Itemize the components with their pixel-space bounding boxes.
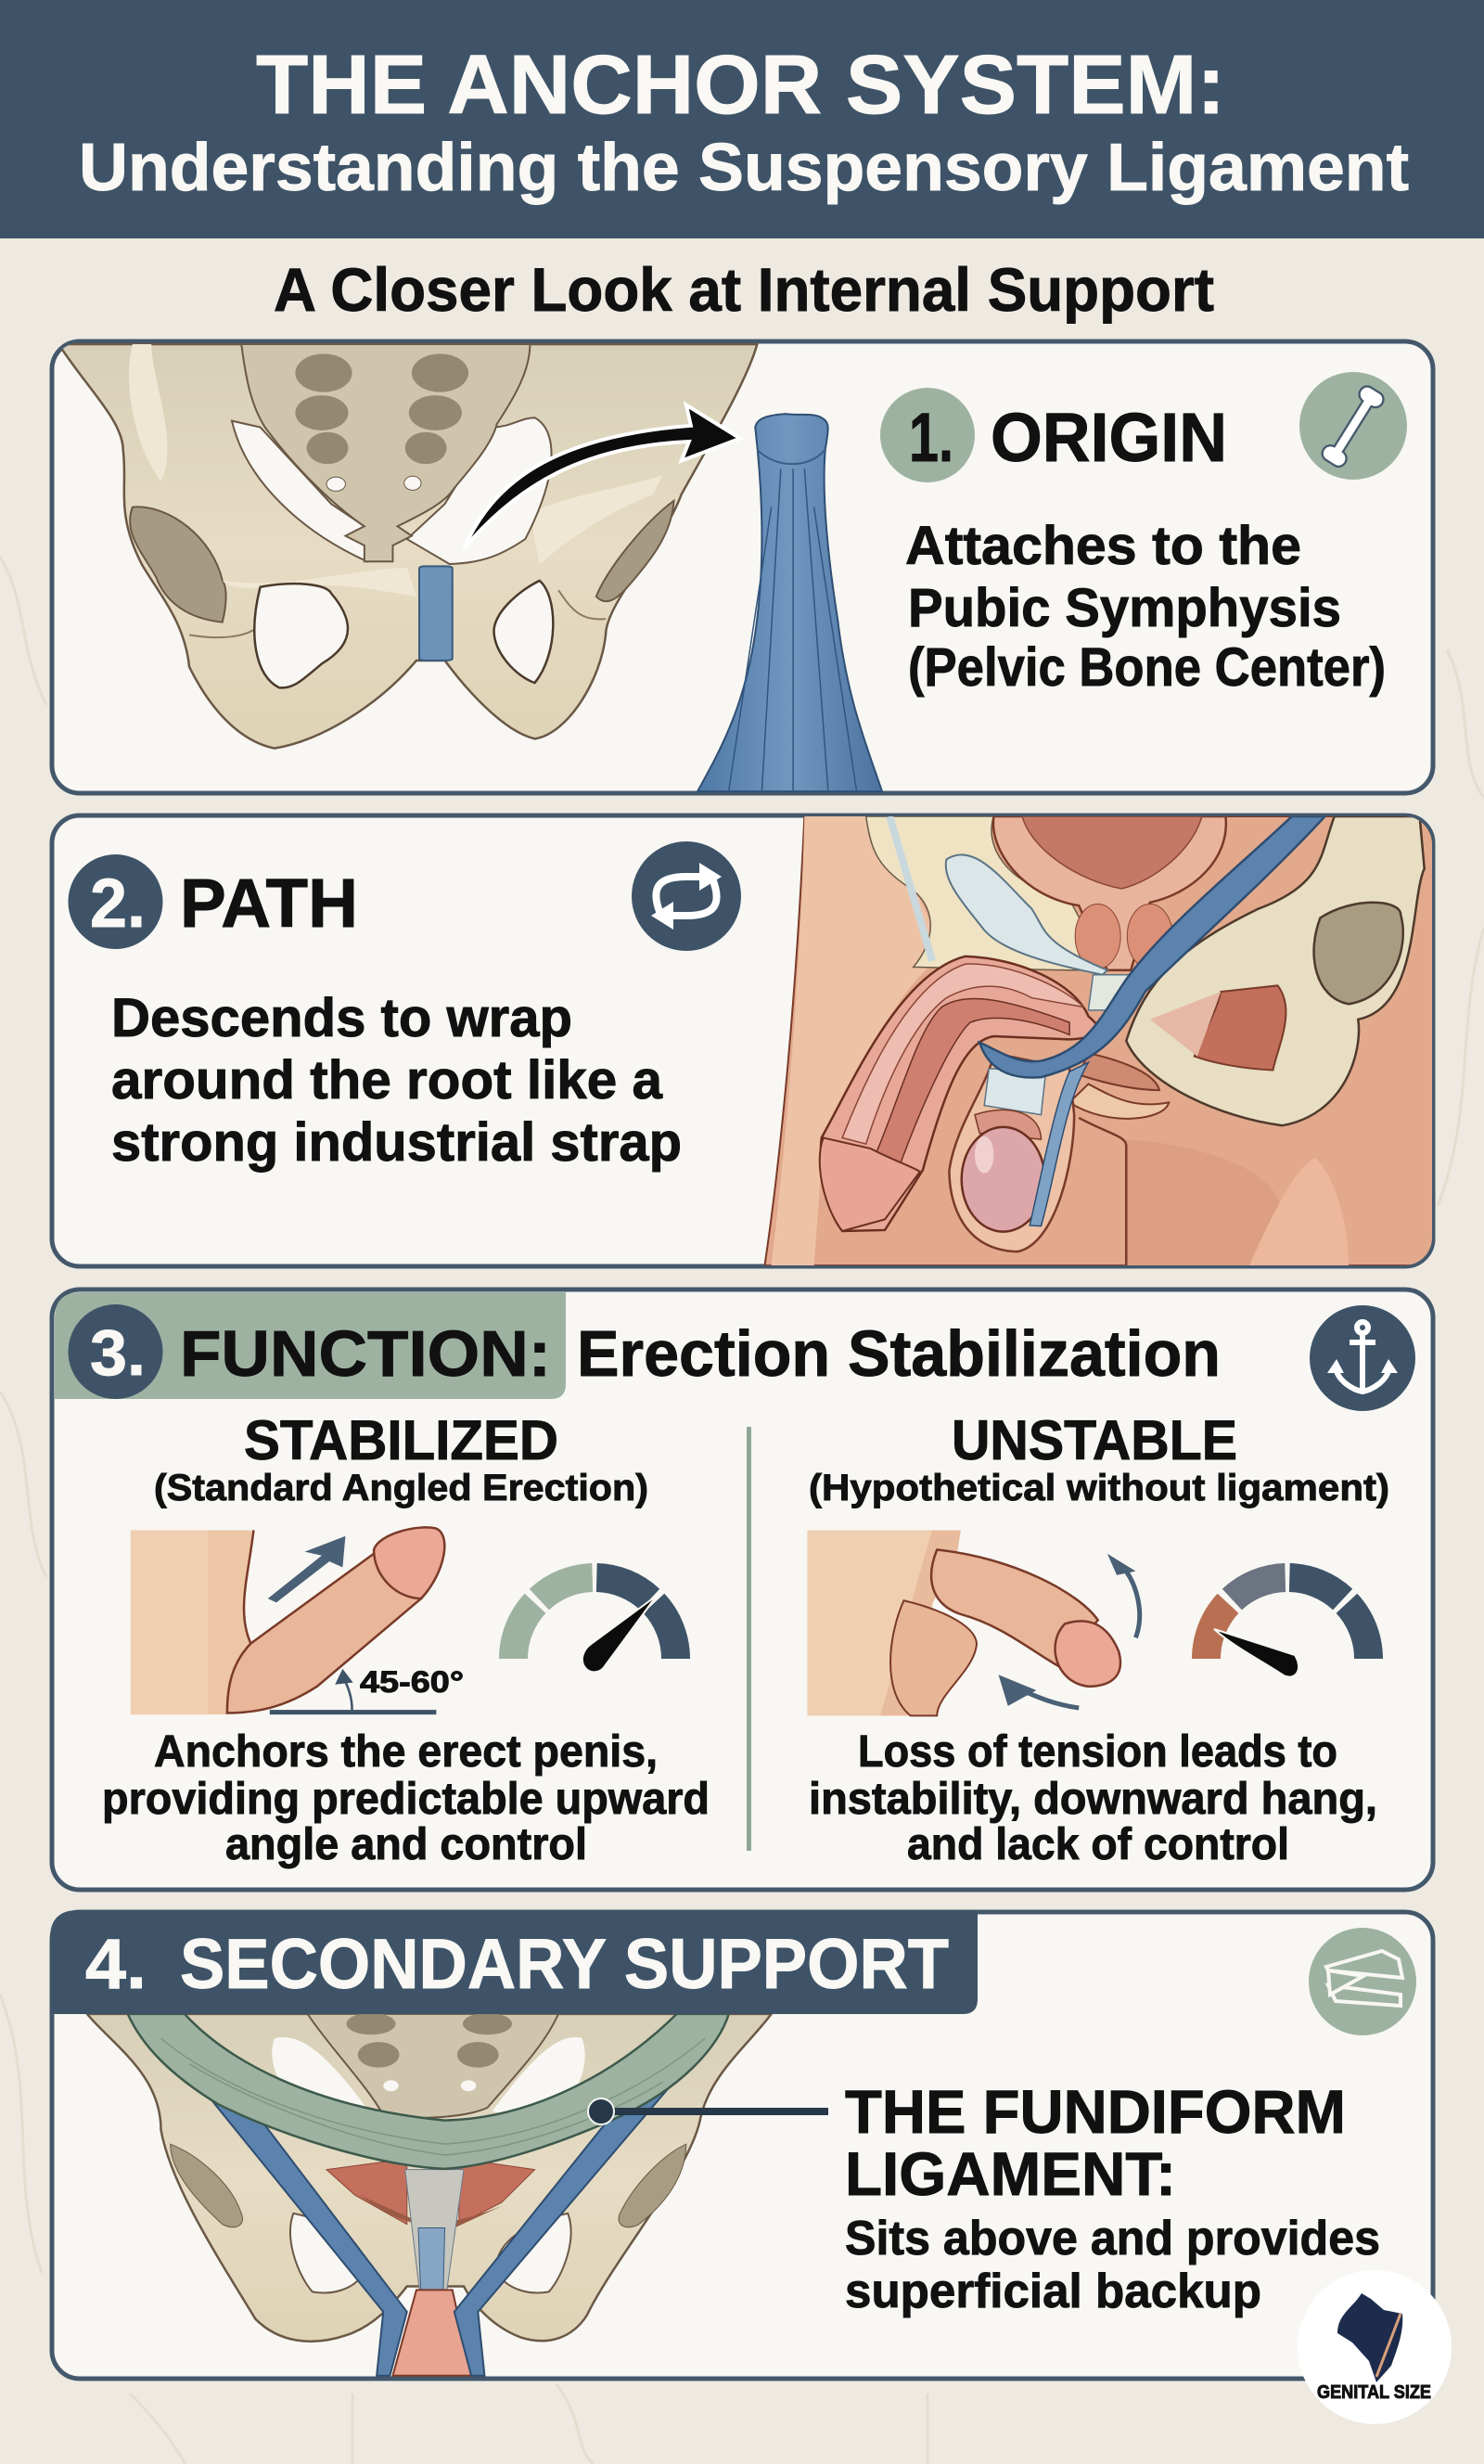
text: origin description — [905, 516, 1386, 698]
heading: function: FUNCTION: — [180, 1317, 551, 1390]
bladder — [993, 816, 1226, 970]
text: fundiform: Sits above and provides — [845, 2212, 1380, 2265]
label: angle: 45-60° — [360, 1665, 464, 1699]
text: stabilized description: providing predictable upward — [102, 1775, 710, 1824]
panel: function — [52, 1290, 1433, 1890]
column: stabilized — [102, 1409, 710, 1869]
sacrum — [308, 2014, 558, 2118]
column: stabilized: STABILIZED — [244, 1409, 558, 1471]
illustration: fundiform ligament — [87, 2013, 772, 2376]
column: unstable: (Hypothetical without ligament) — [809, 1468, 1389, 1508]
gauge: unstable — [1192, 1563, 1383, 1677]
number badge 3 — [69, 1304, 163, 1399]
central structure — [405, 2170, 464, 2304]
column: unstable — [807, 1409, 1389, 1869]
heading tab — [55, 1292, 566, 1399]
callout leader — [588, 2098, 828, 2124]
text: path description: strong industrial strap — [111, 1112, 682, 1173]
text: origin description: Pubic Symphysis — [908, 578, 1341, 638]
number badge 1 — [880, 388, 975, 482]
column: stabilized: (Standard Angled Erection) — [154, 1468, 648, 1508]
title line 1: THE ANCHOR SYSTEM: — [256, 39, 1225, 132]
text: origin description: Attaches to the — [905, 516, 1301, 576]
illustration: pelvis — [58, 344, 882, 791]
heading tab: 4. — [85, 1925, 147, 2004]
number badge 3: 3. — [90, 1316, 146, 1389]
heading: function: Erection Stabilization — [577, 1317, 1221, 1390]
panel: secondary support — [50, 1910, 1433, 2379]
icon: anchor — [1310, 1305, 1415, 1411]
scrotal sac — [949, 1053, 1074, 1251]
text: fundiform: THE FUNDIFORM — [845, 2077, 1346, 2146]
heading tab: SECONDARY SUPPORT — [180, 1925, 949, 2004]
heading tab — [50, 1910, 978, 2014]
heading: function — [180, 1317, 1221, 1390]
panel: origin — [52, 341, 1433, 793]
panel: path — [52, 815, 1439, 1266]
lower tissue — [1079, 1053, 1159, 1090]
muscles — [326, 2159, 407, 2225]
subtitle: A Closer Look at Internal Support — [274, 255, 1214, 324]
text: fundiform: LIGAMENT: — [845, 2139, 1176, 2208]
icon: looping arrows — [632, 841, 741, 951]
text: path description — [111, 988, 682, 1173]
blue strap — [979, 816, 1325, 1078]
left pubic cream — [866, 816, 1107, 970]
arrow: origin pointer — [464, 404, 740, 548]
logo badge: GENITAL SIZE — [1317, 2382, 1431, 2403]
blue bands — [211, 2101, 408, 2377]
text: unstable description: and lack of control — [907, 1820, 1289, 1869]
openings — [290, 2214, 365, 2292]
logo badge — [1298, 2270, 1452, 2424]
text: fundiform — [845, 2077, 1380, 2318]
illustration: sagittal anatomy — [764, 816, 1439, 1265]
diagram: unstable anatomy — [807, 1530, 1140, 1715]
diagram: stabilized anatomy — [131, 1527, 444, 1714]
title banner — [0, 0, 1484, 238]
gauge: stable — [499, 1563, 690, 1672]
ligament strap — [697, 414, 882, 791]
text: origin description: (Pelvic Bone Center) — [908, 637, 1386, 698]
text: fundiform: superficial backup — [845, 2265, 1261, 2318]
icon: folded band — [1309, 1928, 1416, 2035]
shaft cross-section — [821, 956, 1098, 1231]
arrow: upward direction — [268, 1536, 345, 1602]
text: stabilized description — [102, 1727, 710, 1869]
text: path description: Descends to wrap — [111, 988, 572, 1048]
text: path description: around the root like a — [111, 1050, 663, 1110]
number badge 2 — [69, 854, 163, 949]
number badge 2: 2. — [90, 865, 146, 942]
heading: origin: ORIGIN — [991, 399, 1227, 476]
text: stabilized description: Anchors the erect penis, — [154, 1727, 658, 1777]
pink root — [392, 2290, 471, 2376]
column: unstable: UNSTABLE — [952, 1409, 1237, 1471]
arrow: angle arc — [342, 1676, 352, 1710]
pelvic openings — [232, 421, 367, 561]
text: unstable description: instability, downward hang, — [809, 1775, 1377, 1824]
title line 2: Understanding the Suspensory Ligament — [79, 131, 1409, 205]
text: stabilized description: angle and control — [225, 1820, 587, 1869]
blue symphysis band — [419, 566, 453, 661]
heading: path: PATH — [180, 865, 358, 942]
seminal vesicle — [946, 854, 1107, 975]
number badge 1: 1. — [909, 399, 953, 476]
arrow: swing up — [1126, 1572, 1140, 1637]
icon: bone — [1299, 372, 1407, 480]
green ligament — [128, 2014, 729, 2169]
text: unstable description — [809, 1727, 1377, 1869]
arrow: swing back — [1017, 1688, 1079, 1708]
divider — [747, 1427, 751, 1851]
sacrum — [241, 344, 530, 561]
text: unstable description: Loss of tension leads to — [858, 1727, 1337, 1777]
pelvic bone — [1126, 816, 1425, 1125]
